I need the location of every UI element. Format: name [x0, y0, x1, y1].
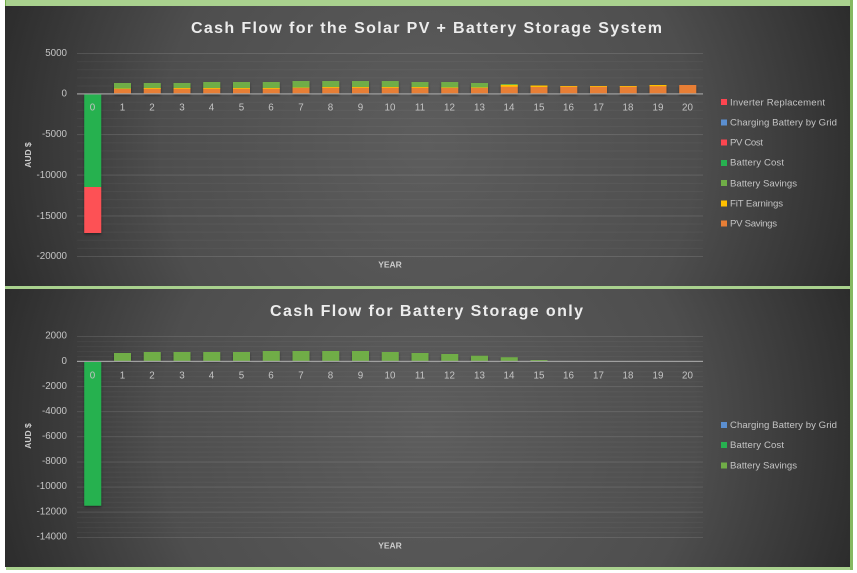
legend: PV Savings — [730, 218, 777, 230]
bar: year 0 costs — [84, 94, 101, 233]
y axis labels: -6000 — [42, 431, 68, 442]
year labels: 6 — [268, 370, 274, 382]
year labels: 3 — [179, 370, 185, 382]
year labels: 15 — [534, 102, 545, 114]
year labels: 3 — [179, 102, 185, 114]
y axis labels: -8000 — [42, 456, 68, 467]
year labels: 9 — [358, 370, 363, 382]
y axis labels: -2000 — [42, 381, 68, 392]
year labels: 11 — [415, 370, 425, 382]
y axis labels: -20000 — [36, 251, 68, 262]
y axis labels: 2000 — [45, 330, 68, 342]
y axis labels: 0 — [62, 88, 68, 100]
year labels: 0 — [90, 370, 96, 382]
year labels: 13 — [474, 370, 485, 382]
year labels: 10 — [385, 102, 396, 114]
year labels: 1 — [120, 370, 125, 382]
legend — [721, 420, 837, 472]
year labels: 2 — [149, 102, 155, 114]
grid lines — [77, 53, 703, 257]
bar: year 0 battery cost — [84, 361, 101, 506]
x axis line — [77, 361, 703, 362]
y axis labels — [36, 48, 68, 262]
year labels: 8 — [328, 370, 334, 382]
y axis labels: -14000 — [36, 532, 68, 542]
year labels: 14 — [504, 370, 515, 382]
title: Cash Flow for the Solar PV + Battery Storage System — [191, 20, 662, 37]
x axis line — [77, 93, 703, 94]
legend: Charging Battery by Grid — [730, 420, 837, 431]
year labels — [90, 370, 693, 382]
y axis title: AUD $ — [23, 142, 33, 168]
bars: years 1 to 15 battery savings — [114, 351, 548, 361]
year labels: 10 — [385, 370, 396, 382]
year labels: 11 — [415, 102, 425, 114]
legend: Battery Cost — [730, 158, 784, 168]
year labels: 4 — [209, 370, 215, 382]
year labels: 16 — [563, 102, 574, 114]
year labels — [90, 102, 693, 114]
year labels: 5 — [239, 370, 245, 382]
year labels: 20 — [682, 370, 693, 382]
legend — [721, 98, 837, 230]
year labels: 9 — [358, 102, 363, 114]
year labels: 19 — [653, 102, 663, 114]
y axis labels: -4000 — [42, 406, 68, 417]
year labels: 4 — [209, 102, 215, 114]
grid lines — [77, 336, 703, 538]
y axis labels: 5000 — [45, 48, 68, 59]
legend: FiT Earnings — [730, 198, 783, 210]
year labels: 12 — [444, 102, 455, 114]
year labels: 13 — [474, 102, 485, 114]
year labels: 1 — [120, 102, 125, 114]
panel: solar PV + battery cash flow — [5, 6, 850, 286]
year labels: 7 — [298, 102, 304, 114]
title: Cash Flow for Battery Storage only — [270, 303, 583, 320]
legend: PV Cost — [730, 138, 763, 148]
year labels: 17 — [593, 102, 604, 114]
y axis labels: -10000 — [36, 481, 68, 492]
year labels: 0 — [90, 102, 96, 114]
y axis labels: -5000 — [42, 129, 68, 140]
legend: Inverter Replacement — [730, 98, 825, 108]
year labels: 2 — [149, 370, 155, 382]
year labels: 16 — [563, 370, 574, 382]
stacked bars: years 1 to 20 — [114, 81, 696, 94]
y axis labels: -15000 — [36, 211, 68, 222]
y axis labels: -12000 — [36, 506, 68, 518]
year labels: 12 — [444, 370, 455, 382]
year labels: 18 — [623, 370, 634, 382]
y axis title: AUD $ — [23, 423, 33, 449]
year labels: 20 — [682, 102, 693, 114]
y axis labels: 0 — [62, 356, 68, 367]
year labels: 6 — [268, 102, 274, 114]
panel: battery storage only cash flow — [5, 289, 850, 567]
y axis labels: -10000 — [36, 170, 68, 181]
year labels: 15 — [534, 370, 545, 382]
year labels: 19 — [653, 370, 663, 382]
legend: Charging Battery by Grid — [730, 118, 837, 128]
y axis labels — [36, 330, 68, 542]
legend: Battery Savings — [730, 460, 797, 472]
year labels: 8 — [328, 102, 334, 114]
year labels: 17 — [593, 370, 604, 382]
year labels: 18 — [623, 102, 634, 114]
year labels: 5 — [239, 102, 245, 114]
year labels: 14 — [504, 102, 515, 114]
legend: Battery Savings — [730, 178, 797, 190]
x axis title: YEAR — [378, 540, 402, 550]
year labels: 7 — [298, 370, 304, 382]
legend: Battery Cost — [730, 440, 784, 451]
x axis title: YEAR — [378, 260, 402, 270]
